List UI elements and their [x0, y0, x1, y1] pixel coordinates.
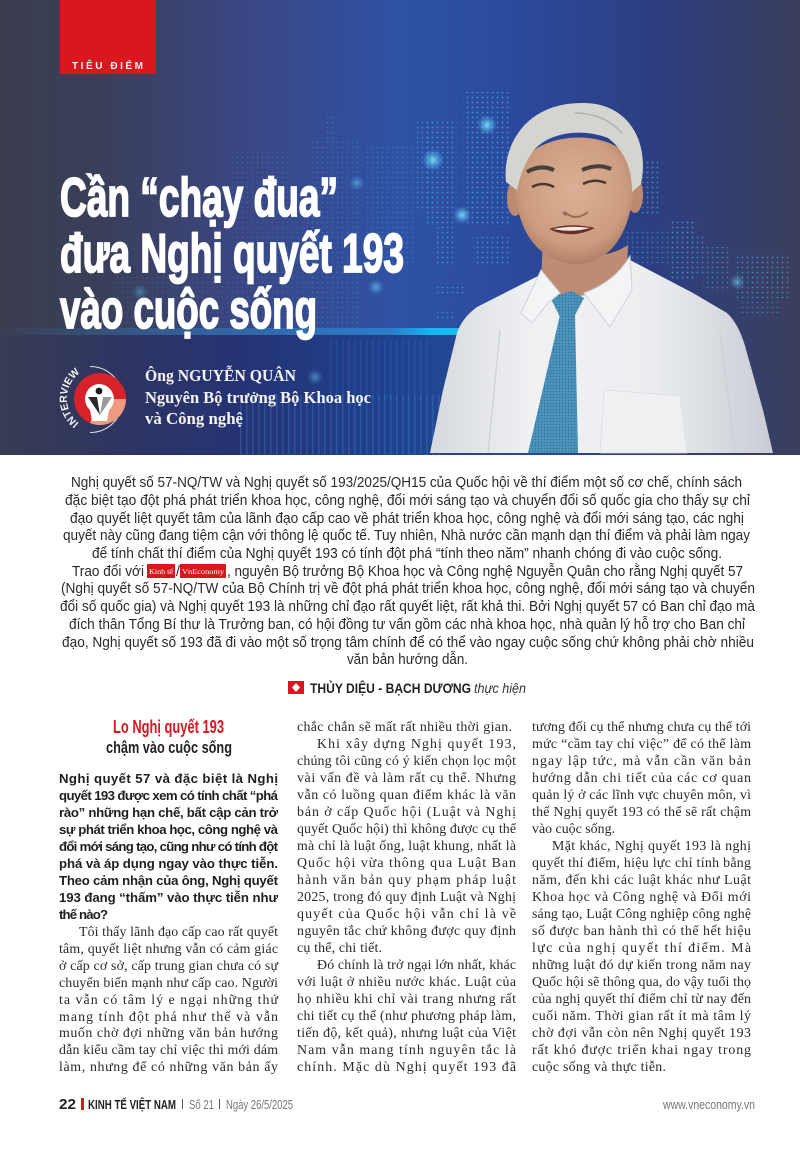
section heading: [106, 717, 232, 757]
body text column 1: tâm, quyết liệt nhưng vẫn có cảm giác: [59, 942, 278, 957]
intro paragraph: [60, 475, 756, 668]
body text column 1: [59, 925, 278, 1075]
body text column 2: Quốc hội vừa thông qua Luật Ban: [297, 856, 516, 871]
section tag: Tiêu điểm: TIÊU ĐIỂM: [72, 59, 143, 72]
body text column 3: năm, đến khi các luật khác như Luật: [532, 873, 751, 888]
body text column 3: Quốc hội sẽ thông qua, do vậy tuổi thọ: [532, 975, 751, 990]
interviewee name and role: Ông NGUYỄN QUÂN: [145, 366, 296, 385]
body text column 3: Khoa học và Công nghệ và Đổi mới: [532, 890, 751, 905]
body text column 2: vẫn có luồng quan điểm khác là văn: [297, 788, 516, 803]
interview question: Nghị quyết 57 và đặc biệt là Nghị: [59, 771, 278, 786]
icon: interview badge: [60, 366, 126, 433]
body text column 2: nguyên tắc chứ không được quy định: [297, 924, 516, 939]
interviewee name and role: và Công nghệ: [145, 409, 243, 428]
interview question: sự phát triển khoa học, công nghệ và: [59, 822, 279, 837]
body text column 2: Khi xây dựng Nghị quyết 193,: [317, 737, 516, 752]
interview question: đổi mới sáng tạo, cũng như có tính đột: [59, 839, 279, 854]
body text column 2: chi tiết cụ thể (như phương pháp làm,: [297, 1009, 516, 1024]
interview question: quyết 193 được xem có tính chất “phá: [59, 788, 279, 803]
article title: đưa Nghị quyết 193: [60, 222, 404, 284]
body text column 3: chờ đợi vẫn còn nên Nghị quyết 193: [532, 1026, 751, 1041]
page footer: KINH TẾ VIỆT NAM: [88, 1097, 176, 1112]
body text column 2: quyết của Quốc hội vẫn chỉ là về: [297, 907, 516, 922]
intro paragraph: văn bản hướng dẫn.: [347, 651, 468, 668]
interview question: 193 đang “thấm” vào thực tiễn như: [59, 890, 278, 905]
article title: [60, 166, 404, 340]
body text column 3: tương đối cụ thể nhưng chưa cụ thể tới: [532, 720, 751, 735]
intro paragraph: đổi số quốc gia) và Nghị quyết 193 là những chỉ đạo rất quyết liệt, rất khả thi. Bởi Nghị quyết 57 có Ban chỉ đạo mà: [60, 599, 756, 615]
intro paragraph: quyết này cũng đang tiệm cận với thông lệ quốc tế. Tuy nhiên, Nhà nước cần mạnh dạn thí điểm và phải làm ngay: [63, 528, 751, 544]
body text column 3: cuối năm. Thời gian rất ít mà tâm lý: [532, 1009, 751, 1024]
body text column 3: sáng tạo, Luật Công nghiệp công nghệ: [532, 907, 751, 922]
body text column 1: mang tính đột phá như thế và vẫn: [59, 1010, 278, 1025]
byline: thực hiện: [474, 681, 526, 696]
page footer: www.vneconomy.vn: [662, 1098, 755, 1112]
body text column 2: chính. Mặc dù Nghị quyết 193 đã: [297, 1060, 516, 1075]
hero banner background: [0, 0, 800, 455]
body text column 2: [297, 720, 517, 1075]
section heading: chậm vào cuộc sống: [106, 738, 232, 757]
intro paragraph: (Nghị quyết số 57-NQ/TW của Bộ Chính trị về đột phá phát triển khoa học, công nghệ, đổi mới sáng tạo và chuyển: [61, 581, 755, 597]
section tag: Tiêu điểm: [60, 0, 156, 74]
intro paragraph: đạo quyết liệt quyết tâm của lãnh đạo cấp cao về phát triển khoa học, công nghệ và đổi mới sáng tạo, các nghị: [70, 511, 744, 527]
interviewee name and role: Nguyên Bộ trưởng Bộ Khoa học: [145, 388, 371, 407]
byline: THỦY DIỆU - BẠCH DƯƠNG: [310, 681, 471, 696]
body text column 1: ta vẫn có tâm lý e ngại những thứ: [59, 993, 278, 1008]
body text column 3: vào cuộc sống.: [532, 822, 615, 837]
body text column 2: Đó chính là trở ngại lớn nhất, khác: [317, 958, 516, 973]
interview question: rào” những hạn chế, bất cập cản trở: [59, 805, 279, 820]
body text column 3: quản lý ở các lĩnh vực chuyên môn, vì: [532, 788, 751, 803]
body text column 2: với luật ở nhiều nước khác. Luật của: [297, 975, 516, 990]
body text column 3: của nghị quyết thí điểm chỉ từ nay đến: [532, 992, 751, 1007]
intro paragraph: để tính chất thí điểm của Nghị quyết 193 có tính đột phá “tính theo năm” nhanh chóng đi vào cuộc sống.: [92, 546, 722, 562]
body text column 2: chắc chắn sẽ mất rất nhiều thời gian.: [297, 720, 512, 735]
intro paragraph: đặc biệt tạo đột phá phát triển khoa học, công nghệ, đổi mới sáng tạo và chuyển đổi số quốc gia cho thấy sự chỉ: [65, 493, 751, 509]
page footer: Ngày 26/5/2025: [226, 1098, 293, 1112]
body text column 1: làm, nhưng để có những văn bản ấy: [59, 1060, 278, 1075]
article title: Cần “chạy đua”: [60, 166, 338, 228]
body text column 1: chuyển biến mạnh như cấp cao. Người: [59, 976, 278, 991]
body text column 1: ở cấp cơ sở, cấp trung gian chưa có sự: [59, 959, 278, 974]
body text column 2: hành văn bản quy phạm pháp luật: [297, 873, 516, 888]
intro paragraph: /: [176, 564, 181, 580]
body text column 3: rất khó được triển khai ngay trong: [532, 1043, 751, 1058]
interviewee name and role: [145, 366, 371, 428]
interview question: phá và áp dụng ngay vào thực tiễn.: [59, 856, 278, 871]
body text column 3: những luật đó dự kiến trong năm nay: [532, 958, 751, 973]
body text column 2: họ nhiều khi chỉ vài trang nhưng rất: [297, 992, 516, 1007]
interview question: [59, 771, 279, 922]
body text column 3: cuộc sống và thực tiễn.: [532, 1060, 666, 1075]
interview question: thế nào?: [59, 907, 108, 922]
body text column 2: bản ở cấp Quốc hội (Luật và Nghị: [297, 805, 516, 820]
body text column 2: mà chỉ là luật ống, luật khung, nhất là: [297, 839, 516, 854]
body text column 2: vài vấn đề và làm rất cụ thể. Nhưng: [297, 771, 516, 786]
body text column 2: quyết Quốc hội) thì không được cụ thể: [297, 822, 517, 837]
intro paragraph: Kinh tế: [149, 568, 174, 576]
body text column 3: hướng dẫn chi tiết của các cơ quan: [532, 771, 751, 786]
body text column 3: thế Nghị quyết 193 có thể sẽ rất chậm: [532, 805, 751, 820]
intro paragraph: Trao đổi với: [72, 564, 144, 580]
body text column 2: cụ thể, chi tiết.: [297, 941, 382, 956]
body text column 2: tiến độ, kết quả), nhưng luật của Việt: [297, 1026, 516, 1041]
body text column 3: Mặt khác, Nghị quyết 193 là nghị: [552, 839, 751, 854]
intro paragraph: VnEconomy: [182, 568, 225, 576]
portrait of Mr Nguyễn Quân: [430, 103, 773, 453]
intro paragraph: Nghị quyết số 57-NQ/TW và Nghị quyết số 193/2025/QH15 của Quốc hội về thí điểm một số cơ chế, chính sách: [71, 475, 742, 491]
page footer: Số 21: [189, 1098, 214, 1112]
article title: vào cuộc sống: [60, 278, 317, 340]
intro paragraph: , nguyên Bộ trưởng Bộ Khoa học và Công nghệ Nguyễn Quân cho rằng Nghị quyết 57: [227, 563, 743, 580]
page footer: 22: [59, 1096, 76, 1113]
icon: interview badge: INTERVIEW: [60, 367, 79, 428]
body text column 3: [532, 720, 751, 1075]
page footer: [59, 1096, 755, 1113]
body text column 3: mức “cầm tay chỉ việc” để có thể làm: [532, 737, 751, 752]
body text column 2: 2025, trong đó quy định Luật và Nghị: [297, 890, 516, 905]
interview question: Theo cảm nhận của ông, Nghị quyết: [59, 873, 279, 888]
body text column 3: số được ban hành thì có thể hết hiệu: [532, 924, 751, 939]
body text column 2: chúng tôi cũng có ý kiến chọn lọc một: [297, 754, 516, 769]
intro paragraph: đích thân Tổng Bí thư là Trưởng ban, có hội đồng tư vấn gồm các nhà khoa học, nhà quản lý hỗ trợ cho Ban chỉ: [69, 616, 746, 633]
body text column 3: quyết thí điểm, hiệu lực chỉ tính bằng: [532, 856, 751, 871]
intro paragraph: đạo, Nghị quyết số 193 đã đi vào một số trọng tâm chính để có thể vào ngay cuộc sống chứ không phải chờ nhiều: [62, 635, 754, 651]
body text column 1: muốn chờ đợi những văn bản hướng: [59, 1026, 278, 1041]
body text column 1: Tôi thấy lãnh đạo cấp cao rất quyết: [79, 925, 278, 940]
body text column 1: dẫn kiểu cầm tay chỉ việc thì mới dám: [59, 1043, 278, 1058]
body text column 2: Nam vẫn mang tính nguyên tắc là: [297, 1043, 516, 1058]
section heading: Lo Nghị quyết 193: [113, 717, 224, 737]
body text column 3: ngay lập tức, mà vẫn cần văn bản: [532, 754, 751, 769]
body text column 3: lực của nghị quyết thí điểm. Mà: [532, 941, 751, 956]
